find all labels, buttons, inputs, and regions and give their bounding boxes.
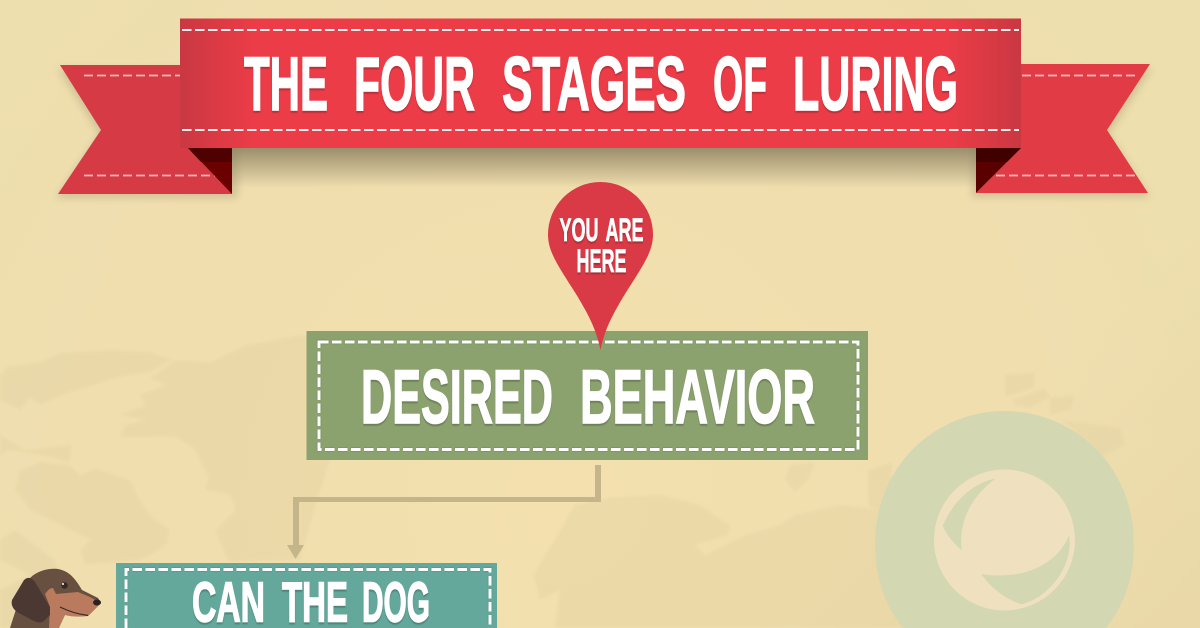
- left ribbon fold: [188, 148, 232, 194]
- panel: can the dog: [116, 563, 497, 628]
- title: FOUR: [354, 42, 475, 127]
- title: [244, 42, 958, 127]
- heading: can the dog: [192, 570, 430, 628]
- title: LURING: [793, 42, 958, 127]
- icon: you are here pin: YOU: [560, 212, 598, 248]
- icon: you are here pin: HERE: [576, 243, 626, 279]
- heading: desired behavior: DESIRED: [361, 355, 553, 440]
- world map watermark: [0, 335, 1125, 628]
- icon: faded circle emblem: [875, 411, 1134, 628]
- icon: dachshund: [10, 569, 101, 628]
- main ribbon banner: [180, 18, 1021, 148]
- title: OF: [713, 42, 767, 127]
- icon: you are here pin: ARE: [606, 212, 644, 248]
- right ribbon tail: [972, 64, 1152, 197]
- ribbon drop shadow: [232, 148, 976, 190]
- left ribbon tail: [56, 65, 238, 198]
- heading: desired behavior: BEHAVIOR: [580, 355, 815, 440]
- icon: you are here pin: [548, 182, 653, 350]
- title: THE: [244, 42, 328, 127]
- title: STAGES: [502, 42, 686, 127]
- panel: desired behavior: [306, 331, 868, 460]
- right ribbon fold: [976, 148, 1021, 193]
- arrow: desired behavior to can the dog: [287, 465, 601, 559]
